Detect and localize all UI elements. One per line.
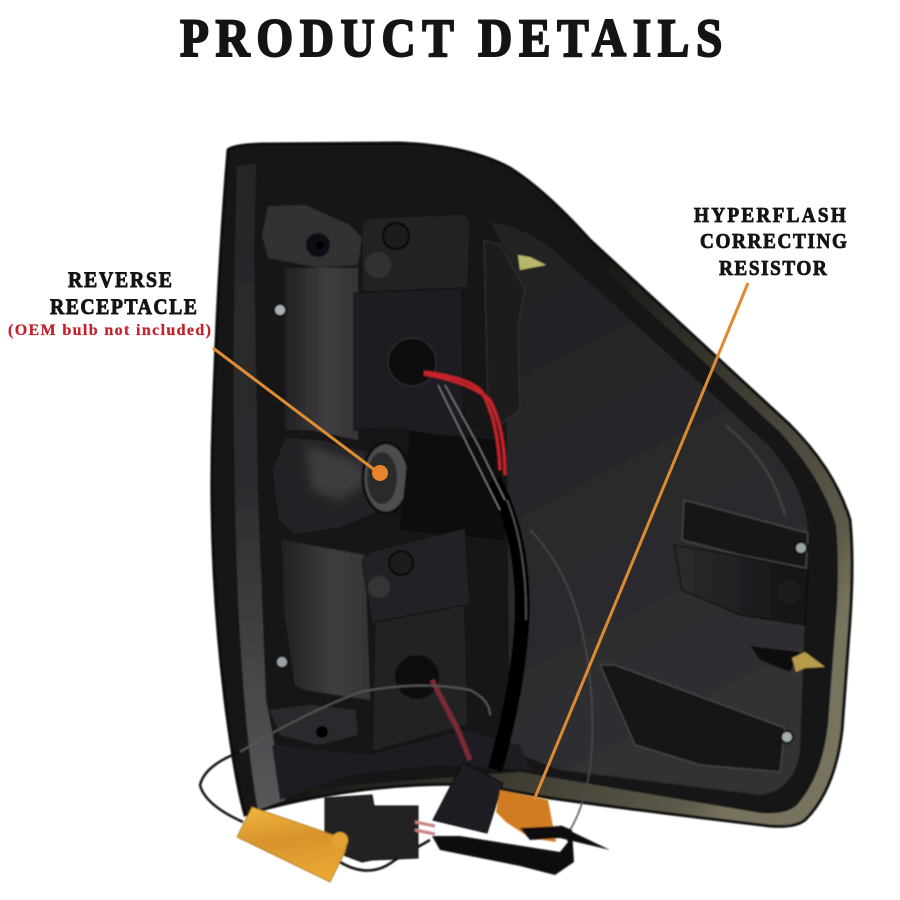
left rim strip — [234, 164, 285, 810]
top corner mount — [262, 205, 362, 268]
lower upper plate — [362, 528, 470, 625]
gold resistor left — [237, 807, 348, 882]
mount post — [306, 233, 330, 257]
bottom rim band — [272, 730, 530, 800]
brass stud upper — [518, 255, 546, 270]
mounting bolt upper left — [274, 304, 286, 316]
bulb housing highlight — [306, 445, 370, 500]
upper plate — [362, 214, 470, 292]
dark centre gap — [400, 432, 505, 540]
resistor mounting tab — [332, 832, 348, 848]
upper grommet — [388, 338, 436, 386]
stud recess — [750, 646, 800, 672]
upper right bracket — [484, 240, 525, 425]
callout: hyperflash resistor — [534, 204, 847, 800]
right resistor fitting — [520, 826, 610, 850]
long thin wire left — [240, 685, 490, 752]
upper grey wires — [438, 385, 505, 510]
hyperflash label line 1: HYPERFLASH — [694, 204, 846, 227]
back panel — [480, 220, 808, 795]
reverse label line 2: RECEPTACLE — [50, 294, 197, 319]
inner curved wall line — [725, 425, 785, 515]
lower grommet — [395, 655, 439, 699]
arrow line to resistor — [534, 283, 748, 800]
bulb housing — [272, 437, 392, 535]
lamp outer housing — [212, 143, 852, 826]
lower plate circle — [389, 551, 413, 575]
right bolt lower — [781, 731, 793, 743]
arrow line to socket — [213, 348, 380, 474]
black strap — [432, 825, 574, 875]
lower red wires — [432, 680, 470, 760]
bottom post hole — [316, 726, 328, 738]
inner left compartment — [262, 200, 510, 790]
brass stud lower — [792, 652, 825, 672]
hyperflash label line 2: CORRECTING — [700, 230, 847, 253]
bottom corner mount — [270, 705, 358, 745]
mount post hole — [316, 241, 324, 249]
reverse note: (OEM bulb not included) — [8, 322, 211, 339]
title: PRODUCT DETAILS — [180, 8, 722, 68]
connector wires — [415, 822, 435, 834]
arrow end dot — [372, 465, 388, 481]
wire to first connector — [340, 840, 430, 871]
tube highlight — [507, 500, 526, 620]
upper plate circle — [383, 223, 409, 249]
reverse socket centre — [367, 452, 397, 504]
plug connector left — [325, 795, 418, 862]
reverse socket — [363, 443, 409, 513]
lower upper plate — [354, 288, 464, 440]
centre connector — [433, 762, 503, 833]
black wire tube — [494, 480, 522, 770]
right block round plug — [776, 579, 802, 605]
gold resistor right — [496, 790, 556, 842]
upper grey wall — [285, 268, 358, 440]
lower wedge — [600, 665, 785, 772]
callout: reverse receptacle — [8, 267, 388, 481]
wire loop outside lamp — [200, 752, 243, 822]
upper plate grey disc — [365, 252, 391, 278]
top rim dark band — [240, 155, 838, 813]
right block lower — [674, 545, 808, 625]
tail lamp photo — [200, 143, 852, 882]
upper red wires — [424, 372, 505, 475]
right bolt upper — [795, 542, 807, 554]
long thin wire right — [530, 530, 592, 830]
lower lower plate — [372, 605, 468, 752]
lower bolt — [276, 656, 288, 668]
right block upper — [682, 500, 808, 568]
hyperflash label line 3: RESISTOR — [719, 257, 827, 280]
reverse label line 1: REVERSE — [68, 267, 172, 292]
lower grey box — [282, 540, 370, 700]
lower plate grey disc — [368, 576, 390, 598]
